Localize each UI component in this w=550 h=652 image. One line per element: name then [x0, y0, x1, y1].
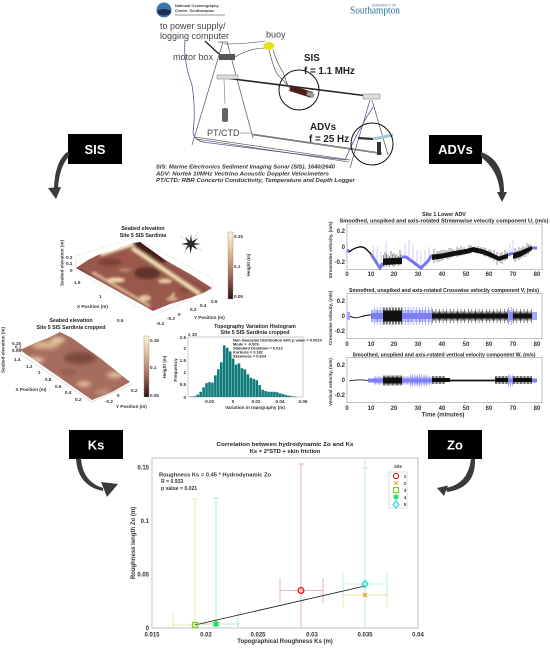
regression annotation: p value = 0.021 — [161, 486, 197, 492]
subtitle: Site 5 SIS Sardinia — [120, 233, 166, 239]
x ticks: 0.02 — [200, 632, 212, 638]
X ticks: 0.5 — [117, 318, 124, 323]
X ticks — [74, 280, 124, 323]
x ticks: 70 — [510, 272, 517, 278]
logo: National Oceanography Centre: Centre, Southampton — [175, 8, 215, 13]
x ticks — [345, 406, 541, 412]
y ticks: -0.2 — [335, 260, 346, 266]
label: ADVs: ADVs — [310, 122, 337, 133]
x ticks: 10 — [368, 342, 375, 348]
crosswise velocity chart — [328, 290, 542, 348]
histogram bars — [190, 345, 296, 397]
label: PT/CTD: PT/CTD — [207, 128, 240, 138]
x ticks: 60 — [486, 272, 493, 278]
arrow: Zo to correlation chart — [437, 459, 475, 496]
elevation ticks: 0.15 — [12, 341, 21, 346]
x ticks: 40 — [439, 406, 446, 412]
tripod frame — [192, 42, 388, 168]
y label: Vertical velocity, (m/s) — [328, 358, 333, 406]
PT/CTD instrument — [222, 79, 228, 122]
instrument captions: PT/CTD: RBR Concerto Conductivity, Temperature and Depth Logger — [156, 178, 356, 184]
panel: topography variation histogram — [173, 324, 322, 410]
elevation ticks: 0.1 — [66, 261, 73, 266]
variation ticks: 0.06 — [299, 399, 308, 404]
marker: site 4 — [213, 620, 219, 628]
label: buoy: buoy — [266, 30, 286, 40]
surface plot — [20, 332, 130, 400]
frame base thick line — [196, 135, 382, 162]
Y ticks: 0.4 — [200, 303, 207, 308]
colorbar: 0.15 — [234, 234, 243, 239]
streamwise velocity chart — [328, 221, 542, 279]
blue noise — [347, 312, 537, 320]
marker: site 2 — [363, 593, 367, 597]
PT/CTD leader — [240, 132, 252, 134]
vertical chart title: Smoothed, unspiked and axis-rotated vertical velocity component W, (m/s) — [352, 352, 536, 358]
error bars: site 3 — [173, 499, 198, 628]
x ticks: 0.025 — [250, 632, 266, 638]
x ticks: 80 — [534, 406, 541, 412]
axis frame — [20, 350, 132, 402]
error bars: site 5 — [343, 458, 387, 628]
ADV detail circle — [351, 123, 393, 165]
x ticks: 0.03 — [306, 632, 318, 638]
logo: University of Southampton: Southampton — [350, 6, 401, 16]
x ticks: 0 — [345, 272, 349, 278]
frequency ticks: 1 — [183, 370, 186, 375]
frequency ticks: 2 — [183, 346, 186, 351]
X ticks: 0.6 — [55, 384, 62, 389]
elevation ticks: 0 — [70, 268, 73, 273]
motor box leader — [205, 41, 219, 54]
blue noise — [368, 378, 537, 382]
x ticks: 30 — [415, 272, 422, 278]
regression line — [195, 586, 365, 625]
variation ticks: 0.04 — [276, 399, 285, 404]
distribution statistics: Mode = -0.009 — [233, 342, 259, 346]
X ticks: 0.4 — [65, 390, 72, 395]
marker: site 3 — [192, 622, 198, 628]
colorbar — [144, 336, 167, 398]
Ks label box: Ks — [88, 438, 104, 452]
X axis label: X Position (m) — [16, 387, 47, 392]
x ticks: 20 — [391, 406, 398, 412]
distribution statistics — [233, 338, 322, 358]
marker dots — [92, 255, 154, 309]
legend: 2 — [404, 481, 407, 486]
x ticks: 50 — [463, 342, 470, 348]
black noise — [383, 377, 532, 384]
variation ticks: -0.02 — [204, 399, 215, 404]
panel: correlation chart — [131, 442, 424, 645]
Y ticks: 0 — [178, 312, 181, 317]
x ticks: 40 — [439, 342, 446, 348]
x ticks: 20 — [391, 342, 398, 348]
colorbar: 0.1 — [234, 264, 241, 269]
frequency ticks: 2.5 — [180, 335, 186, 340]
colorbar: 0.1 — [150, 365, 157, 370]
title: Seabed elevation — [49, 318, 93, 324]
SIS label box: SIS — [85, 142, 106, 157]
Zo label box: Zo — [447, 438, 463, 452]
X ticks: 1.5 — [74, 280, 81, 285]
black band 15-23 min — [383, 258, 402, 265]
title: Correlation between hydrodynamic Zo and Ks — [216, 442, 354, 448]
x ticks: 40 — [439, 272, 446, 278]
elevation ticks — [12, 341, 22, 353]
elevation axis label: Seabed elevation (m) — [0, 327, 6, 373]
frequency ticks — [180, 335, 186, 400]
Y axis label: Y Position (m) — [194, 315, 225, 320]
legend: 5 — [404, 502, 407, 507]
colorbar: 0.05 — [234, 294, 243, 299]
subtitle: Site 5 SIS Sardinia cropped — [221, 330, 289, 336]
black band 70-78 min — [513, 246, 532, 259]
elevation axis label: Seabed elevation (m) — [60, 240, 64, 286]
x ticks: 30 — [415, 406, 422, 412]
x ticks — [345, 342, 541, 348]
ADV sensors — [358, 135, 393, 155]
frequency label: Frequency — [173, 358, 178, 382]
subtitle: Site 5 SIS Sardinia cropped — [37, 325, 105, 331]
scale multiplier: x 10 — [188, 332, 197, 337]
title: Topography Variation Histogram — [214, 324, 296, 330]
colorbar: Height (m) — [162, 355, 167, 378]
elevation ticks: 0.05 — [12, 348, 21, 353]
distribution statistics: Standard Deviation = 0.013 — [233, 346, 283, 350]
error bars: site 2 — [343, 468, 387, 628]
legend: 4 — [404, 495, 407, 500]
X ticks — [14, 357, 82, 402]
colorbar: 0.15 — [150, 338, 159, 343]
x ticks: 50 — [463, 406, 470, 412]
x label: Topographical Roughness Ks (m) — [237, 639, 333, 645]
x label: Time (minutes) — [422, 412, 464, 418]
elevation ticks — [66, 255, 73, 273]
panel: ADV velocity charts — [328, 212, 549, 418]
arrow: SIS to seabed maps — [48, 151, 69, 199]
x ticks: 0.015 — [144, 632, 160, 638]
motor box — [219, 54, 235, 60]
legend — [389, 464, 407, 508]
panel: cropped seabed elevation map — [0, 318, 167, 409]
black band 36-68 min — [432, 247, 508, 261]
instrument captions: ADV: Nortek 10MHz Vectrino Acoustic Doppler Velocimeters — [155, 172, 329, 178]
black trace — [349, 380, 368, 381]
Zo label box — [428, 430, 482, 459]
legend: 1 — [404, 474, 407, 479]
SIS sonar head — [290, 88, 314, 96]
x ticks: 80 — [534, 272, 541, 278]
buoy — [264, 42, 274, 50]
frequency ticks: 0.5 — [180, 382, 186, 387]
y ticks: 0.2 — [337, 299, 346, 305]
Y axis label: Y Position (m) — [116, 404, 147, 409]
X ticks: 1.2 — [26, 364, 33, 369]
y ticks — [335, 229, 346, 266]
Y ticks: 0.2 — [131, 388, 138, 393]
regression annotation: R = 0.933 — [161, 479, 183, 485]
Y ticks: 0.6 — [211, 299, 218, 304]
beam brackets — [217, 75, 380, 99]
x ticks — [144, 632, 424, 638]
colorbar — [228, 232, 251, 299]
title: Seabed elevation — [121, 226, 165, 232]
beam — [217, 77, 364, 96]
Y ticks: -0.4 — [156, 321, 164, 326]
y label: Streamwise velocity, (m/s) — [328, 221, 333, 279]
variation ticks — [204, 399, 308, 404]
frequency ticks: 1.5 — [180, 358, 186, 363]
y ticks: 0 — [146, 626, 150, 632]
X ticks: 1.4 — [14, 357, 21, 362]
y ticks — [335, 363, 346, 399]
label: power supply: to power supply/ — [160, 21, 226, 31]
black noise — [383, 310, 532, 322]
y ticks: 0.1 — [141, 519, 150, 525]
ADVs label box — [429, 135, 482, 164]
streamwise chart title: Smoothed, unspiked and axis-rotated Streamwise velocity component U, (m/s) — [340, 218, 549, 224]
y label: Crosswise velocity, (m/s) — [328, 290, 333, 345]
y ticks: 0.15 — [137, 466, 150, 472]
label: SIS frequency: f = 1.1 MHz — [304, 66, 355, 77]
y ticks: -0.2 — [335, 393, 346, 399]
y ticks — [137, 466, 150, 632]
black trace — [349, 247, 371, 254]
X ticks: 1 — [99, 294, 102, 299]
Y ticks — [156, 299, 218, 326]
x ticks: 10 — [368, 406, 375, 412]
x ticks: 0 — [345, 342, 349, 348]
variation ticks: 0.02 — [252, 399, 261, 404]
surface plot — [76, 242, 212, 311]
x ticks: 70 — [510, 406, 517, 412]
distribution statistics: Non Gaussian Distribution with p value = 0.0010 — [233, 338, 322, 342]
x ticks: 20 — [391, 272, 398, 278]
variation label: Variation in topography (m) — [225, 405, 285, 410]
blue spikes — [373, 240, 513, 268]
label: SIS: SIS — [304, 53, 320, 64]
y ticks: 0.2 — [337, 229, 346, 235]
x ticks: 10 — [368, 272, 375, 278]
regression annotation: Roughness Ks = 0.45 * Hydrodynamic Zo — [159, 472, 271, 478]
x ticks: 70 — [510, 342, 517, 348]
y ticks: -0.2 — [335, 329, 346, 335]
error bars: site 4 — [195, 498, 238, 628]
x ticks: 50 — [463, 272, 470, 278]
instrument captions — [155, 164, 356, 184]
colorbar: 0.05 — [150, 393, 159, 398]
Y ticks: 0.2 — [190, 307, 197, 312]
x ticks: 30 — [415, 342, 422, 348]
elevation ticks: 0.2 — [66, 255, 73, 260]
black spikes — [384, 243, 530, 267]
SIS detail circle — [279, 70, 319, 110]
x ticks: 80 — [534, 342, 541, 348]
logo: National Oceanography Centre — [156, 2, 225, 18]
legend: 3 — [404, 488, 407, 493]
distribution statistics: Kurtosis = 0.182 — [233, 350, 264, 354]
black trace — [350, 315, 371, 318]
Ks label box — [69, 430, 123, 459]
panel: seabed elevation map — [60, 226, 251, 326]
arrow: Ks to correlation chart — [76, 459, 118, 497]
arrow: ADVs to velocity charts — [481, 152, 507, 202]
distribution statistics: Skewness = 0.634 — [233, 354, 267, 358]
x ticks: 0.035 — [357, 632, 373, 638]
logo: National Oceanography Centre: National Oceanography — [175, 3, 220, 8]
regression annotation — [159, 472, 271, 492]
Y ticks: -0.2 — [167, 316, 175, 321]
X ticks: 0.8 — [45, 377, 52, 382]
y ticks: 0 — [342, 378, 346, 384]
cables — [224, 41, 290, 88]
SIS label box — [68, 134, 122, 164]
y ticks: 0.05 — [137, 572, 150, 578]
legend: Site — [394, 464, 403, 469]
vertical velocity chart — [328, 358, 542, 418]
instrument captions: SIS: Marine Electronics Sediment Imaging Sonar (SIS), 1640/2640 — [156, 164, 336, 170]
y ticks: 0 — [342, 245, 346, 251]
crosswise chart title: Smoothed, unspiked and axis-rotated Crosswise velocity component V, (m/s) — [349, 288, 539, 294]
y label: Roughness length Zo (m) — [131, 507, 137, 579]
icon: compass rose — [180, 232, 202, 254]
variation ticks: 0 — [232, 399, 235, 404]
axes — [188, 337, 303, 397]
y ticks: 0 — [342, 314, 346, 320]
axes — [152, 458, 418, 628]
X axis label: X Position (m) — [77, 304, 108, 309]
frequency ticks: 0 — [183, 395, 186, 400]
elevation ticks: 0.1 — [15, 344, 22, 350]
Y ticks: -0.2 — [105, 399, 113, 404]
axis frame — [76, 238, 212, 316]
logo: University of Southampton: UNIVERSITY OF — [372, 4, 396, 8]
marker: site 5 — [362, 580, 368, 588]
x ticks — [345, 272, 541, 278]
x ticks: 0 — [345, 406, 349, 412]
label: motor box: motor box — [173, 52, 214, 62]
chart heading: Site 1 Lower ADV — [422, 212, 466, 218]
Y ticks: 0 — [117, 393, 120, 398]
instrument rig diagram — [160, 21, 393, 168]
error bars: site 1 — [280, 464, 323, 628]
header logos — [156, 2, 401, 18]
colorbar: Height (m) — [246, 253, 251, 276]
blue segments — [347, 248, 537, 268]
y ticks — [335, 299, 346, 335]
y ticks: 0.2 — [337, 363, 346, 369]
label: logging computer: logging computer — [160, 31, 229, 41]
marker: site 1 — [298, 588, 304, 593]
Y ticks — [105, 388, 138, 404]
x ticks: 60 — [486, 406, 493, 412]
X ticks: 0.2 — [75, 397, 82, 402]
X ticks: 1 — [38, 370, 41, 375]
subtitle: Ks = 2*STD + skin friction — [250, 449, 321, 455]
label: ADV frequency: f = 25 Hz — [309, 134, 349, 145]
ADVs label box: ADVs — [438, 142, 473, 157]
x ticks: 0.04 — [412, 632, 424, 638]
blue cable — [185, 40, 373, 160]
x ticks: 60 — [486, 342, 493, 348]
